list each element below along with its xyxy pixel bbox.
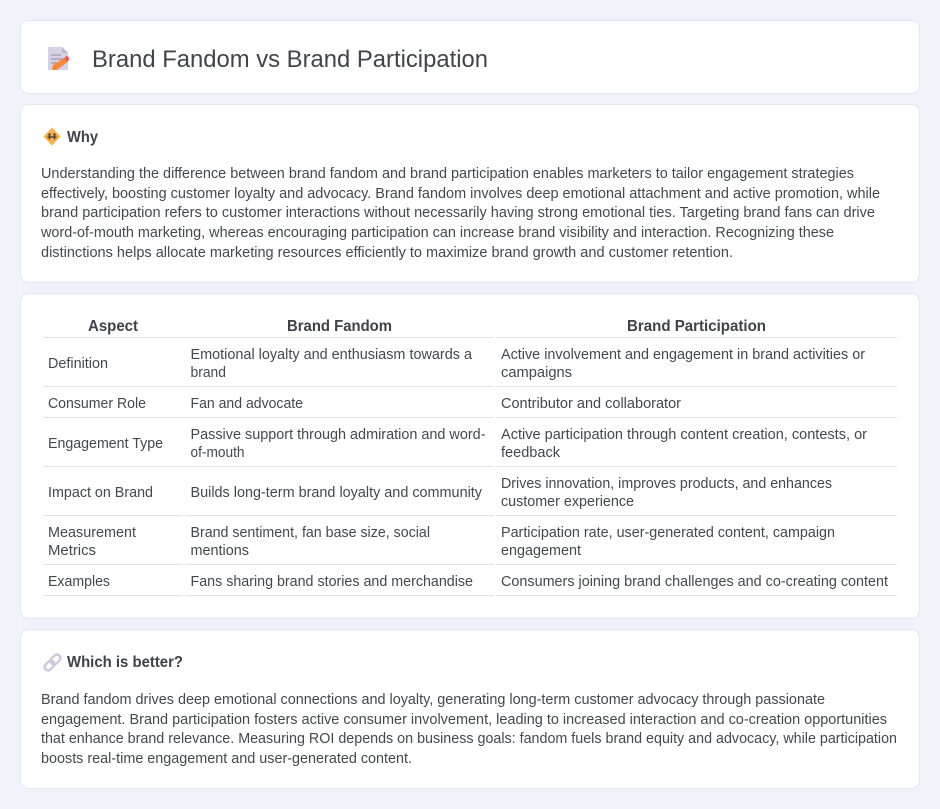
row: engagement type: Active participation through content creation, contests, or <box>501 427 867 443</box>
row: consumer role <box>48 396 681 412</box>
panel: title header <box>20 20 920 94</box>
heading: why: Why <box>67 129 98 146</box>
panel: comparison table <box>20 294 920 618</box>
row: measurement metrics: Participation rate, user-generated content, campaign <box>501 525 835 541</box>
table header row: Brand Fandom <box>287 318 392 335</box>
row: definition: campaigns <box>501 365 572 381</box>
text block: which is better paragraph: boosts real-time engagement and user-generated content. <box>41 751 412 767</box>
table header row: Brand Participation <box>627 318 766 335</box>
text block: why paragraph <box>40 166 880 261</box>
row: engagement type: Engagement Type <box>48 436 163 452</box>
text block: which is better paragraph: engagement. Brand participation fosters active consumer involvement, leading to increased interaction and co-creation opportunities <box>41 712 887 728</box>
row: engagement type: feedback <box>501 445 561 461</box>
row: measurement metrics: mentions <box>190 543 249 559</box>
icon: link <box>43 653 62 672</box>
panel: why <box>20 104 920 282</box>
text block: which is better paragraph: Brand fandom drives deep emotional connections and loyalty, generating long-term customer advocacy through passionate <box>41 692 825 708</box>
row: definition: Definition <box>48 356 108 372</box>
row: definition: brand <box>190 365 226 381</box>
row: engagement type: of-mouth <box>190 445 244 461</box>
text block: which is better paragraph: that enhance brand relevance. Measuring ROI depends on business goals: fandom fuels brand equity and advocacy, while participation <box>41 731 897 747</box>
row: measurement metrics: Metrics <box>48 543 96 559</box>
heading: which is better: Which is better? <box>67 654 183 671</box>
row: impact on brand: Impact on Brand <box>48 485 153 501</box>
icon: document with pencil <box>48 47 70 70</box>
row: engagement type: Passive support through admiration and word- <box>190 427 486 443</box>
row: measurement metrics: Brand sentiment, fan base size, social <box>190 525 430 541</box>
text block: why paragraph: word-of-mouth marketing, whereas encouraging participation can increase brand visibility and interaction. Recognizing these <box>40 225 834 241</box>
row: measurement metrics: engagement <box>501 543 581 559</box>
row: examples: Examples <box>48 574 110 590</box>
row: examples: Consumers joining brand challenges and co-creating content <box>501 574 888 590</box>
row: impact on brand <box>48 476 832 510</box>
text block: why paragraph: effectively, boosting customer loyalty and advocacy. Brand fandom involves deep emotional attachment and active promotion, while <box>41 186 880 202</box>
title: Brand Fandom vs Brand Participation <box>92 46 488 73</box>
row: impact on brand: customer experience <box>501 494 634 510</box>
icon: warning diamond <box>44 128 60 146</box>
row: consumer role: Contributor and collaborator <box>501 396 681 412</box>
row: definition: Active involvement and engagement in brand activities or <box>501 347 865 363</box>
row: measurement metrics: Measurement <box>48 525 136 541</box>
row: measurement metrics <box>48 525 835 559</box>
text block: which is better paragraph <box>41 692 897 767</box>
row: impact on brand: Drives innovation, improves products, and enhances <box>501 476 832 492</box>
panel: which is better <box>20 630 920 788</box>
table header row <box>88 318 766 335</box>
text block: why paragraph: distinctions helps allocate marketing resources efficiently to maximize brand growth and customer retention. <box>41 245 733 261</box>
row: engagement type <box>48 427 867 461</box>
row: consumer role: Consumer Role <box>48 396 146 412</box>
table header row: Aspect <box>88 318 139 335</box>
row: consumer role: Fan and advocate <box>190 396 303 412</box>
text block: why paragraph: Understanding the difference between brand fandom and brand participation enables marketers to tailor engagement strategies <box>41 166 854 182</box>
row: definition: Emotional loyalty and enthusiasm towards a <box>190 347 472 363</box>
row: examples: Fans sharing brand stories and merchandise <box>190 574 473 590</box>
row: examples <box>48 574 888 590</box>
text block: why paragraph: brand participation refers to customer interactions without necessarily having strong emotional ties. Targeting brand fans can drive <box>41 205 875 221</box>
row: definition <box>48 347 865 381</box>
row: impact on brand: Builds long-term brand loyalty and community <box>190 485 483 501</box>
